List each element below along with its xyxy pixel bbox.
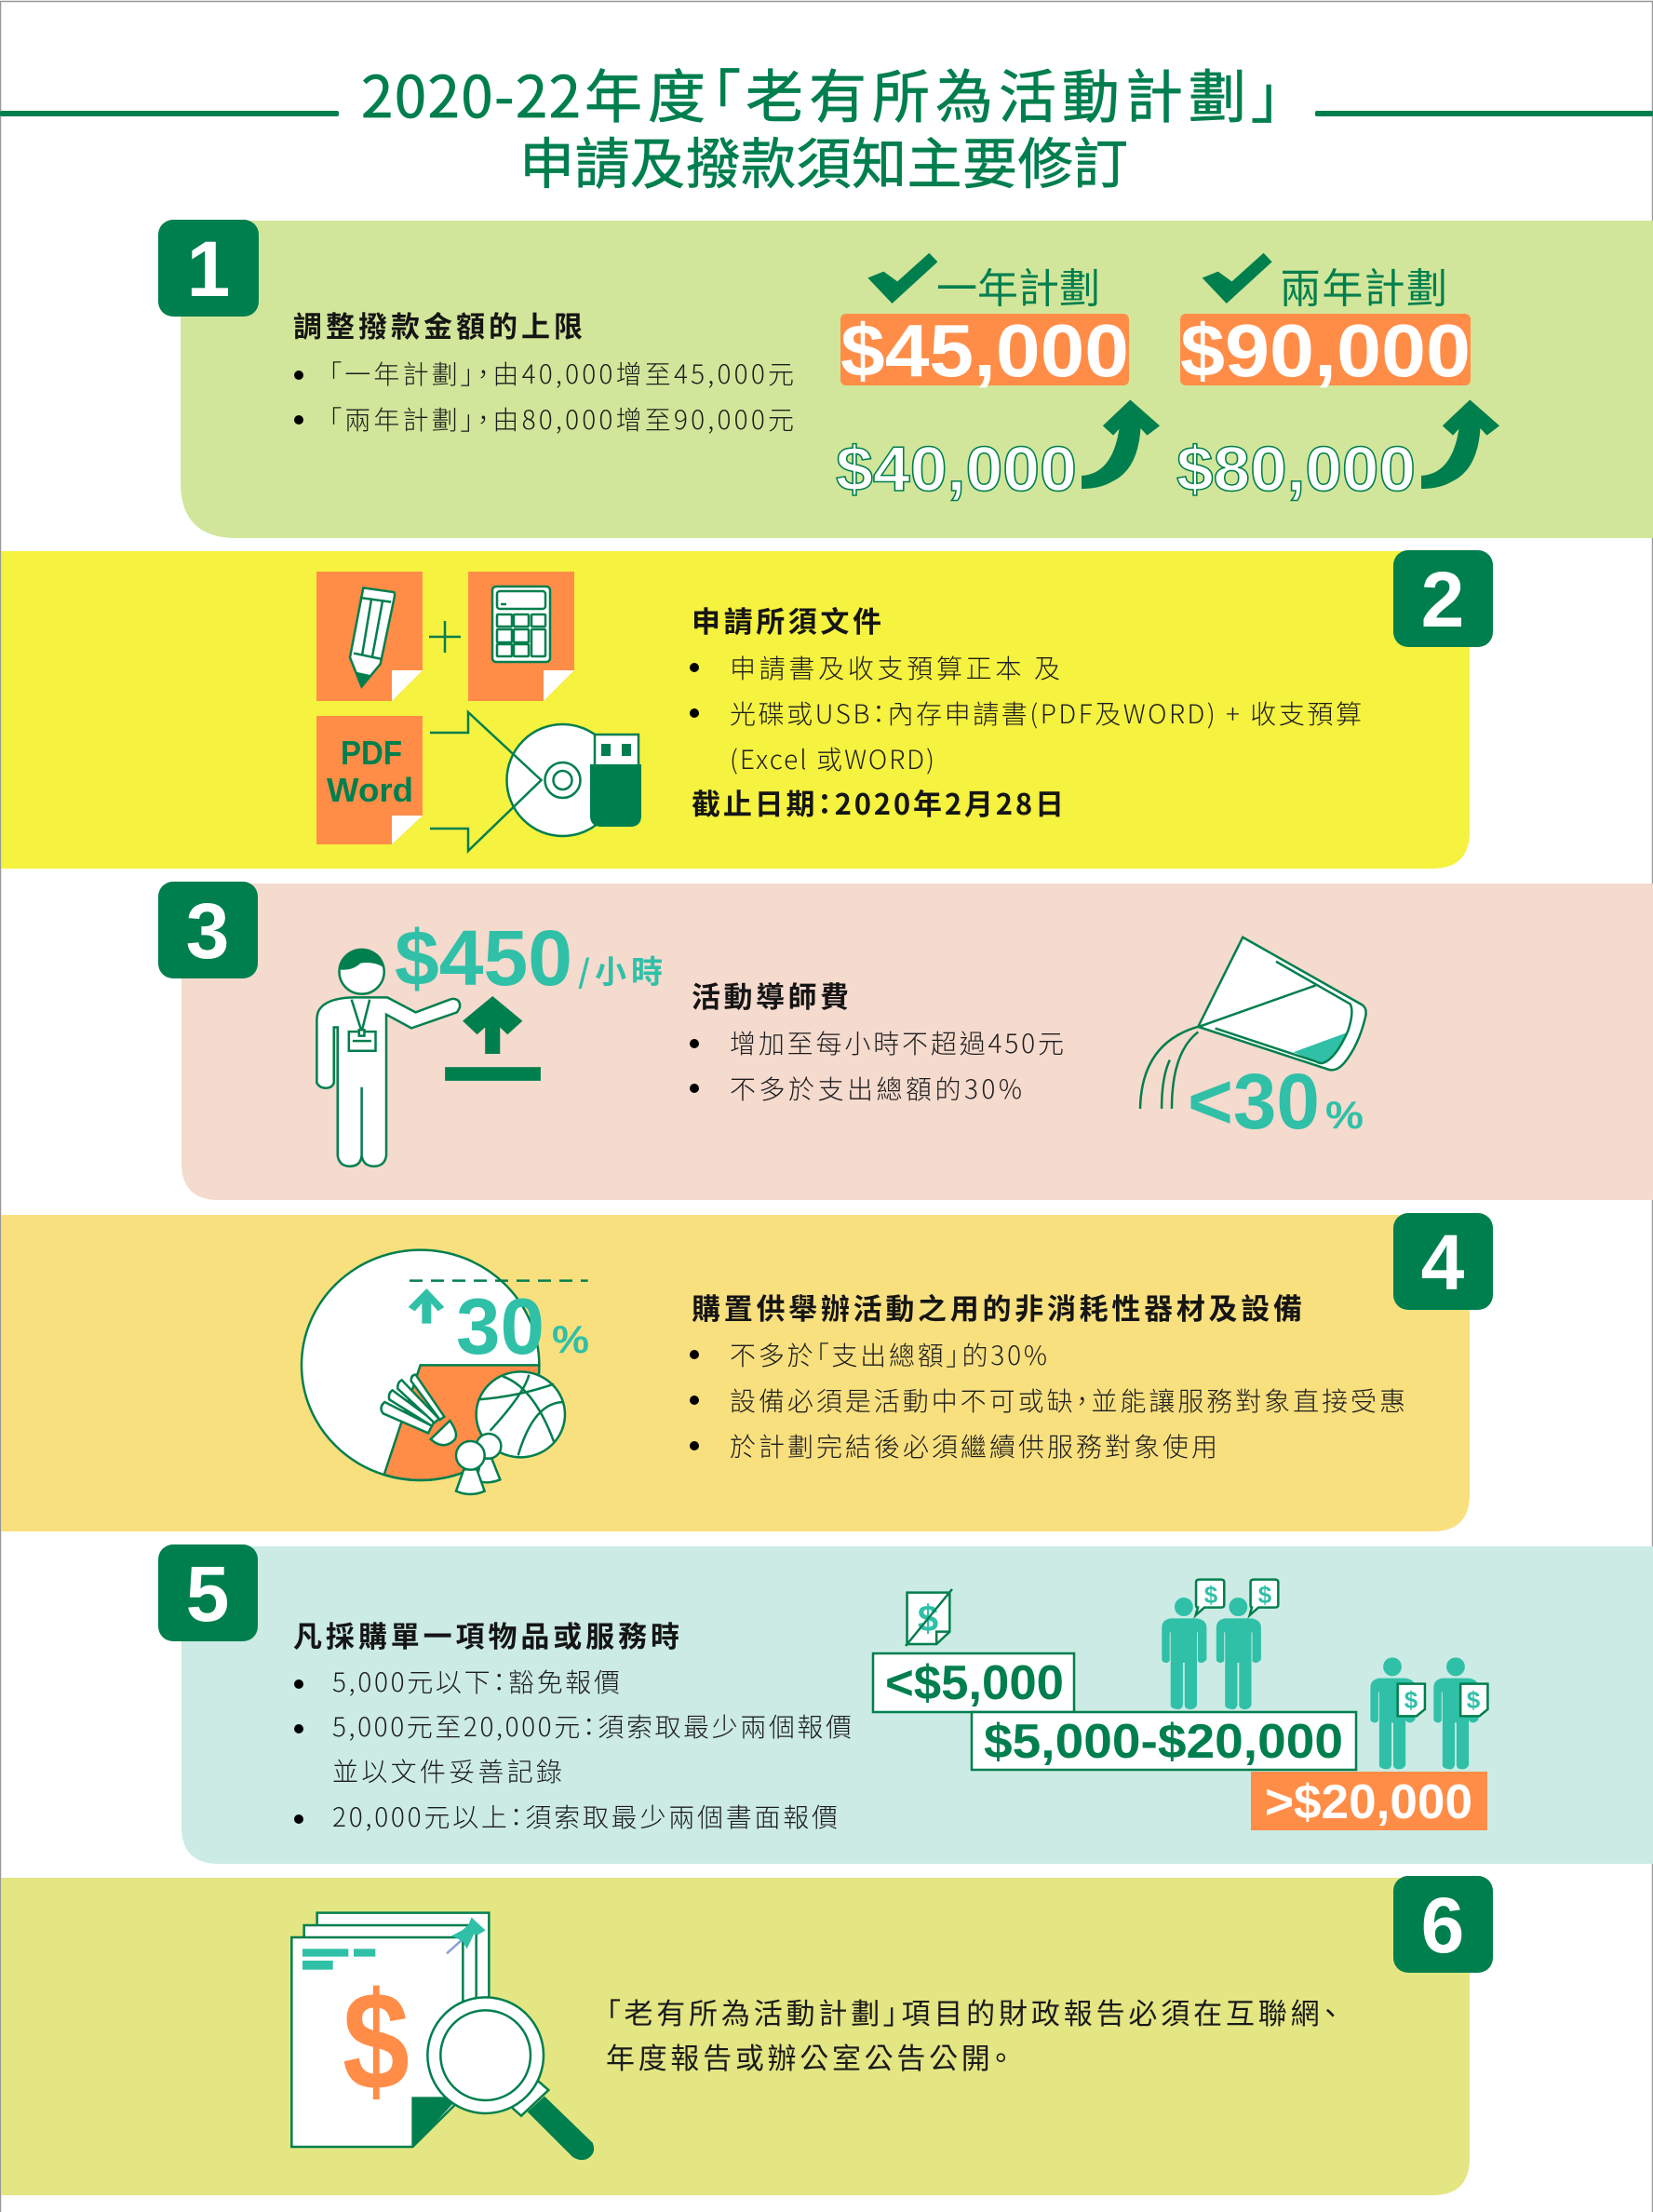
icon: two people with documents: $ — [1467, 1686, 1481, 1714]
title line 1: 2020-22 — [361, 50, 581, 134]
icon: no quotation document: $ — [918, 1598, 938, 1639]
new amount 45,000: $45,000 — [840, 309, 1129, 392]
panel 4: equipment — [2, 1213, 1493, 1531]
label: 30 percent: % — [552, 1317, 589, 1361]
icon: instructor — [316, 950, 460, 1167]
label: under 30 percent: % — [1325, 1093, 1364, 1137]
tier: over 20000: >$20,000 — [1265, 1775, 1472, 1829]
bullet list: 設備必須是活動中不可或缺，並能讓服務對象直接受惠 — [730, 1382, 1405, 1419]
bullet list — [294, 355, 794, 438]
arrow up 1 — [1082, 399, 1160, 489]
icon: no quotation document — [906, 1589, 952, 1646]
badge 4 — [1393, 1213, 1493, 1310]
label: 30 percent — [456, 1283, 589, 1371]
icon: document with calculator — [468, 572, 574, 701]
old amount 40,000: $40,000 — [836, 434, 1077, 505]
heading: 凡採購單一項物品或服務時 — [293, 1613, 679, 1655]
icon: report with magnifier — [291, 1913, 594, 2160]
badge 1 — [158, 220, 259, 317]
icon: PDF Word document: PDF — [341, 734, 402, 772]
badge 6: 6 — [1421, 1882, 1464, 1969]
panel 5: procurement — [158, 1544, 1653, 1864]
title line 2: 申請及撥款須知主要修訂 — [519, 120, 1128, 199]
panel 3: instructor fee — [158, 882, 1653, 1200]
deadline: 截止日期：2020年2月28日 — [692, 781, 1064, 823]
icon: USB drive — [590, 735, 641, 827]
icon: pouring cup — [1140, 937, 1366, 1109]
bullet list — [294, 1663, 852, 1835]
panel 1: funding ceiling — [158, 220, 1653, 538]
icon: PDF Word document — [316, 716, 423, 844]
bullet list: 不多於「支出總額」的30% — [730, 1336, 1047, 1373]
badge 3 — [158, 882, 258, 978]
bullet list — [690, 1336, 1405, 1464]
badge 2: 2 — [1421, 556, 1464, 643]
rate $450 per hour — [395, 914, 663, 1002]
text block: 「老有所為活動計劃」項目的財政報告必須在互聯網、 — [606, 1990, 1337, 2032]
badge 6 — [1393, 1876, 1493, 1973]
icon: arrow outline — [430, 712, 542, 851]
bullet list: 光碟或USB：內存申請書(PDF及WORD) + 收支預算 — [730, 695, 1362, 732]
bullet list: 並以文件妥善記錄 — [332, 1752, 562, 1789]
title line 1: 年度「老有所為活動計劃」 — [585, 50, 1281, 134]
badge 5: 5 — [186, 1550, 229, 1638]
old amount 80,000: $80,000 — [1176, 434, 1416, 505]
arrow up 2 — [1421, 399, 1499, 489]
icon: up arrow on bar — [445, 996, 541, 1081]
bullet list: (Excel 或WORD) — [730, 740, 934, 777]
label: under 30 percent: <30 — [1188, 1058, 1320, 1145]
bullet list: 申請書及收支預算正本 及 — [730, 649, 1060, 686]
icon: two people speaking: $ — [1204, 1581, 1218, 1609]
rate $450 per hour: /小時 — [578, 947, 663, 992]
icon: dollar sign: $ — [343, 1962, 410, 2119]
badge 5 — [158, 1544, 258, 1641]
label: two-year plan: 兩年計劃 — [1280, 255, 1447, 315]
bullet list: 不多於支出總額的30% — [730, 1070, 1022, 1107]
icon: two people speaking — [1162, 1580, 1278, 1709]
panel 6: financial report publication — [2, 1876, 1493, 2195]
icon: two people with documents: $ — [1404, 1686, 1418, 1714]
icon: two people speaking: $ — [1258, 1581, 1272, 1609]
text block: 年度報告或辦公室公告公開。 — [606, 2035, 1008, 2077]
icon: pie with sports equipment — [302, 1250, 588, 1494]
icon: check mark two years — [1203, 253, 1272, 303]
badge 3: 3 — [186, 887, 229, 975]
heading: 調整撥款金額的上限 — [293, 303, 583, 345]
label: one-year plan: 一年計劃 — [936, 255, 1100, 315]
icon: PDF Word document: Word — [327, 771, 413, 809]
badge 4: 4 — [1421, 1219, 1465, 1306]
bullet list: 增加至每小時不超過450元 — [730, 1024, 1064, 1061]
panel 2: required documents — [2, 550, 1493, 869]
bullet list: 於計劃完結後必須繼續供服務對象使用 — [730, 1427, 1217, 1464]
tier: under 5000: <$5,000 — [885, 1656, 1064, 1710]
label: 30 percent: 30 — [456, 1283, 544, 1371]
icon: two people with documents — [1370, 1657, 1487, 1769]
bullet list: 5,000元至20,000元：須索取最少兩個報價 — [332, 1707, 852, 1745]
heading: 購置供舉辦活動之用的非消耗性器材及設備 — [692, 1286, 1302, 1328]
bullet list — [690, 649, 1362, 777]
rate $450 per hour: $450 — [395, 914, 572, 1002]
bullet list — [690, 1024, 1064, 1107]
icon: check mark one year — [867, 253, 937, 303]
new amount 90,000: $90,000 — [1180, 309, 1471, 392]
icon: document with pencil — [316, 572, 423, 701]
text block — [606, 1990, 1337, 2077]
badge 2 — [1393, 550, 1493, 647]
bullet list: 「兩年計劃」，由80,000增至90,000元 — [329, 400, 794, 438]
icon: plus — [429, 621, 461, 653]
bullet list: 「一年計劃」，由40,000增至45,000元 — [329, 355, 794, 392]
tier: 5000 to 20000: $5,000-$20,000 — [984, 1715, 1343, 1769]
badge 1: 1 — [187, 225, 230, 313]
heading: 申請所須文件 — [692, 599, 881, 641]
title — [0, 50, 1653, 199]
icon: CD disc — [506, 724, 618, 836]
bullet list: 20,000元以上：須索取最少兩個書面報價 — [332, 1798, 838, 1835]
bullet list: 5,000元以下：豁免報價 — [332, 1663, 620, 1700]
heading: 活動導師費 — [692, 974, 849, 1016]
